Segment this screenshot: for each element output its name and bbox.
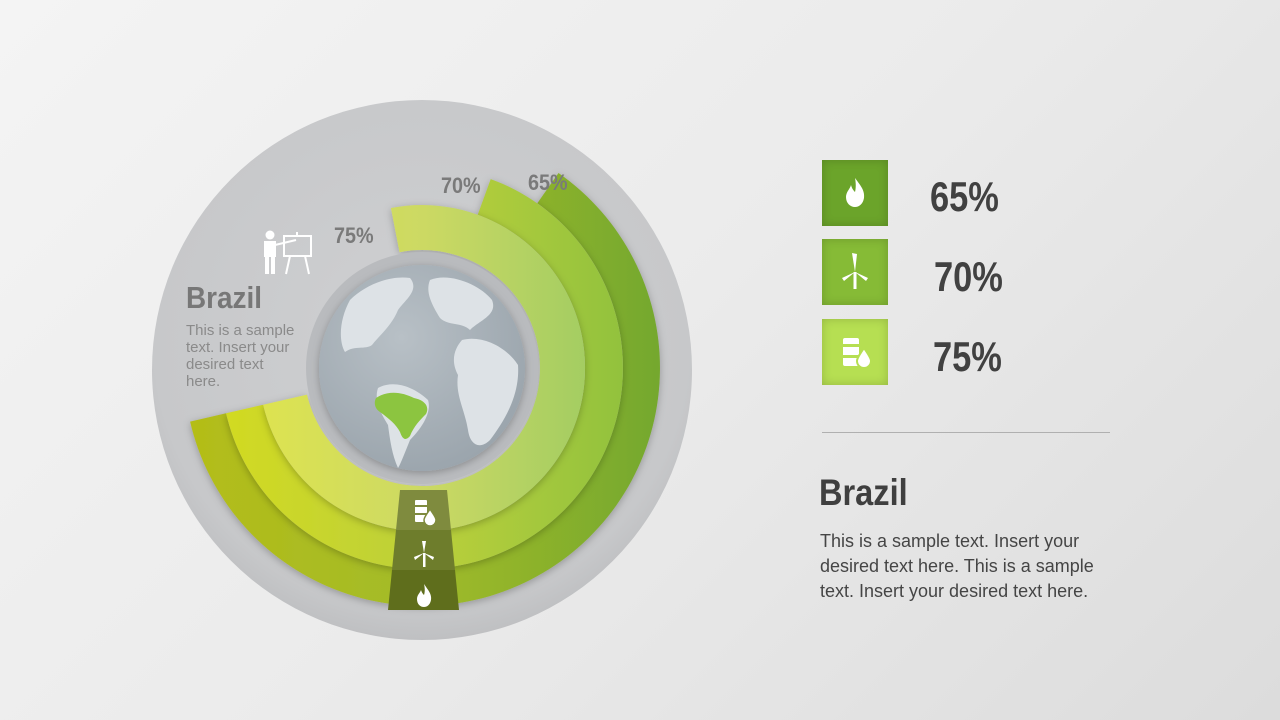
label: 70%: 70% — [441, 174, 481, 198]
ring: 75% inner — [263, 205, 585, 531]
text: 70% — [934, 253, 1003, 300]
icon: flame — [417, 584, 431, 607]
ring: 65% outer — [190, 173, 660, 606]
legend: 70% — [822, 239, 1003, 305]
left text block: desired text — [186, 356, 264, 373]
icon: barrel drop — [413, 500, 436, 526]
label: 65%: 65% — [528, 171, 568, 195]
left text block: This is a sample — [186, 322, 294, 339]
left text block: here. — [186, 373, 220, 390]
divider — [822, 432, 1110, 433]
background disc — [152, 100, 692, 640]
right heading: Brazil: Brazil — [819, 472, 908, 513]
highlight: Brazil — [375, 393, 427, 439]
globe — [306, 252, 538, 484]
label: 75%: 75% — [334, 224, 374, 248]
icon: barrel square — [822, 319, 888, 385]
legend: 65% — [822, 160, 999, 226]
icon: presenter — [264, 230, 311, 274]
right text block: This is a sample text. Insert your desired text here. This is a sample text. Insert your desired text here. — [820, 531, 1094, 601]
icon strip — [388, 490, 459, 610]
icon: wind turbine — [414, 541, 434, 567]
left text block: text. Insert your — [186, 339, 289, 356]
text: 65% — [930, 173, 999, 220]
left heading: Brazil: Brazil — [186, 280, 262, 315]
left text block — [186, 322, 294, 390]
ring: 70% middle — [226, 179, 623, 569]
legend: 75% — [822, 319, 1002, 385]
icon: wind square — [822, 239, 888, 305]
text: 75% — [933, 333, 1002, 380]
icon: flame square — [822, 160, 888, 226]
